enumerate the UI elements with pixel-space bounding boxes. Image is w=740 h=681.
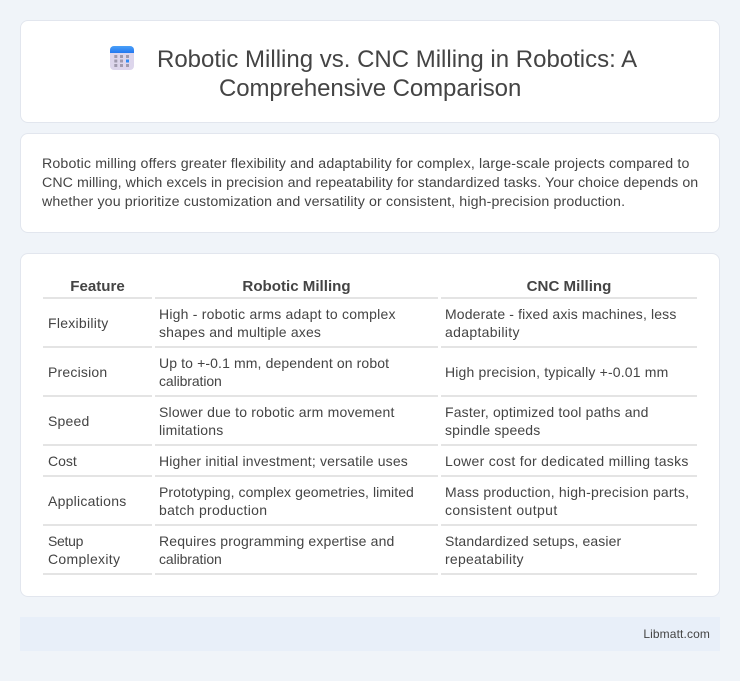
table row: Speed: Speed: [48, 413, 89, 429]
text block: summary: CNC milling, which excels in precision and repeatability for standardized tasks. Your choice depends on: [42, 175, 698, 191]
table row: Speed: Slower due to robotic arm movement: [159, 404, 395, 420]
text block: summary: whether you prioritize customization and versatility or consistent, high-precision production.: [42, 194, 625, 210]
table row: Setup Complexity: [43, 533, 697, 575]
table row: Applications: [43, 484, 697, 526]
panel: title card: Robotic Milling vs. CNC Milling in Robotics: A: [157, 46, 637, 73]
table row: Cost: Cost: [48, 453, 77, 469]
text block: summary: [42, 156, 698, 210]
table row: Flexibility: Moderate - fixed axis machines, less: [445, 306, 676, 322]
table row: Setup Complexity: Setup: [48, 533, 83, 549]
panel: comparison table: [20, 253, 720, 597]
table header: Feature: [70, 278, 125, 295]
table row: Setup Complexity: repeatability: [445, 551, 524, 567]
text block: summary: Robotic milling offers greater flexibility and adaptability for complex, large-scale projects compared to: [42, 156, 690, 172]
table row: Setup Complexity: Requires programming expertise and: [159, 533, 394, 549]
title: [157, 46, 637, 102]
footer text: source: Libmatt.com: [643, 627, 710, 641]
table row: Flexibility: shapes and multiple axes: [159, 324, 321, 340]
table row: Setup Complexity: calibration: [159, 551, 222, 567]
table row: Precision: Precision: [48, 364, 107, 380]
table row: Applications: Prototyping, complex geometries, limited: [159, 484, 414, 500]
table header: CNC Milling: [527, 278, 611, 295]
panel: introduction: [20, 133, 720, 233]
table row: Applications: Mass production, high-precision parts,: [445, 484, 689, 500]
table row: Applications: Applications: [48, 493, 126, 509]
table row: Flexibility: adaptability: [445, 324, 520, 340]
table row: Flexibility: High - robotic arms adapt to complex: [159, 306, 396, 322]
table row: Precision: Up to +-0.1 mm, dependent on robot: [159, 355, 389, 371]
table row: Precision: calibration: [159, 373, 222, 389]
table row: Flexibility: Flexibility: [48, 315, 109, 331]
footer: [20, 617, 720, 651]
table row: Speed: Faster, optimized tool paths and: [445, 404, 649, 420]
table row: Cost: [43, 453, 697, 477]
table row: Speed: limitations: [159, 422, 223, 438]
table row: Applications: consistent output: [445, 502, 558, 518]
table row: Speed: spindle speeds: [445, 422, 540, 438]
table row: Setup Complexity: Complexity: [48, 551, 120, 567]
table row: Flexibility: [43, 306, 697, 348]
panel: title card: Comprehensive Comparison: [219, 75, 521, 102]
table row: Applications: batch production: [159, 502, 267, 518]
table row: Setup Complexity: Standardized setups, easier: [445, 533, 621, 549]
table row: Precision: [43, 355, 697, 397]
icon: calendar: [110, 46, 134, 70]
table row: Cost: Lower cost for dedicated milling tasks: [445, 453, 689, 469]
table row: Cost: Higher initial investment; versatile uses: [159, 453, 408, 469]
table row: Precision: High precision, typically +-0.01 mm: [445, 364, 668, 380]
panel: title card: [20, 20, 720, 123]
table header: [43, 278, 697, 299]
table row: Speed: [43, 404, 697, 446]
table header: Robotic Milling: [242, 278, 351, 295]
